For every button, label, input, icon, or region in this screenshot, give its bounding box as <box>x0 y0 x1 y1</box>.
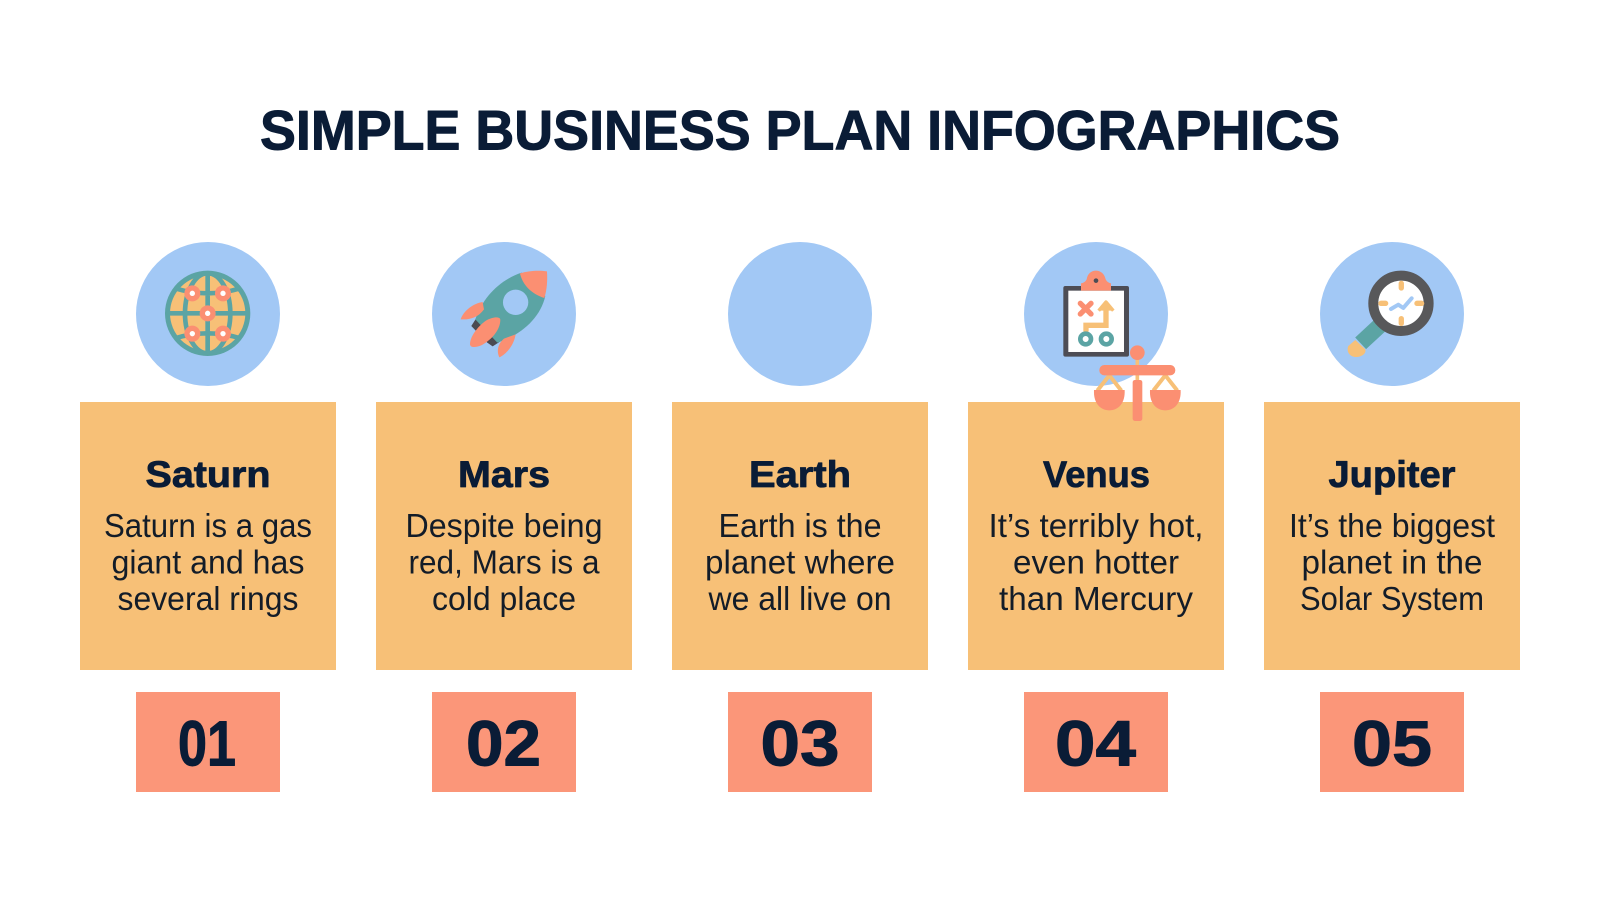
icon circle: Venus <box>1024 242 1168 386</box>
card text: Mars: Despite being <box>406 507 602 544</box>
icon circle: Jupiter <box>1320 242 1464 386</box>
card text: Venus: It’s terribly hot, <box>988 507 1204 544</box>
card text: Saturn: giant and has <box>112 544 304 580</box>
card: Earth <box>672 402 928 670</box>
card text: Saturn: Saturn is a gas <box>104 507 312 544</box>
card heading: Venus: Venus <box>1043 454 1150 495</box>
icon: rocket <box>461 271 547 357</box>
card: Saturn <box>80 402 336 670</box>
card text: Venus: even hotter <box>1013 544 1179 580</box>
panel: Jupiter <box>1264 242 1520 792</box>
card text: Saturn: several rings <box>118 580 298 617</box>
card text: Mars <box>406 507 602 617</box>
card text: Venus: than Mercury <box>999 580 1193 617</box>
card text: Earth <box>705 507 895 617</box>
card text: Jupiter <box>1289 507 1495 617</box>
card: Jupiter <box>1264 402 1520 670</box>
panel: Earth <box>672 242 928 792</box>
card heading: Jupiter: Jupiter <box>1328 454 1456 495</box>
card text: Saturn <box>104 507 312 617</box>
number box: 02 <box>432 692 576 792</box>
icon circle: Earth <box>728 242 872 386</box>
number box: 03 <box>728 692 872 792</box>
card heading: Saturn: Saturn <box>146 454 270 495</box>
panel: Venus <box>968 242 1224 792</box>
number: 05: 05 <box>1352 708 1432 780</box>
card: Mars <box>376 402 632 670</box>
title: SIMPLE BUSINESS PLAN INFOGRAPHICS <box>260 98 1340 162</box>
card text: Mars: red, Mars is a <box>408 544 600 580</box>
card text: Jupiter: Solar System <box>1300 580 1484 617</box>
card text: Jupiter: It’s the biggest <box>1289 507 1495 544</box>
card text: Earth: we all live on <box>708 580 892 617</box>
icon: globe <box>165 271 250 356</box>
card text: Earth: planet where <box>705 544 895 580</box>
icon circle: Mars <box>432 242 576 386</box>
icon: strategy clipboard <box>1063 271 1129 357</box>
card text: Jupiter: planet in the <box>1302 544 1482 580</box>
card text: Mars: cold place <box>432 580 576 617</box>
card: Venus <box>968 402 1224 670</box>
number: 01: 01 <box>178 708 236 780</box>
icon circle: Saturn <box>136 242 280 386</box>
number: 02: 02 <box>466 708 541 780</box>
card text: Venus <box>988 507 1204 617</box>
number: 03: 03 <box>760 708 840 780</box>
card text: Earth: Earth is the <box>718 507 882 544</box>
number box: 05 <box>1320 692 1464 792</box>
number box: 01 <box>136 692 280 792</box>
number box: 04 <box>1024 692 1168 792</box>
panel: Mars <box>376 242 632 792</box>
panel: Saturn <box>80 242 336 792</box>
card heading: Mars: Mars <box>458 454 550 495</box>
icon: scales <box>1094 345 1181 421</box>
card heading: Earth: Earth <box>749 454 851 495</box>
number: 04: 04 <box>1055 708 1136 780</box>
icon: magnifying glass <box>1348 276 1429 357</box>
